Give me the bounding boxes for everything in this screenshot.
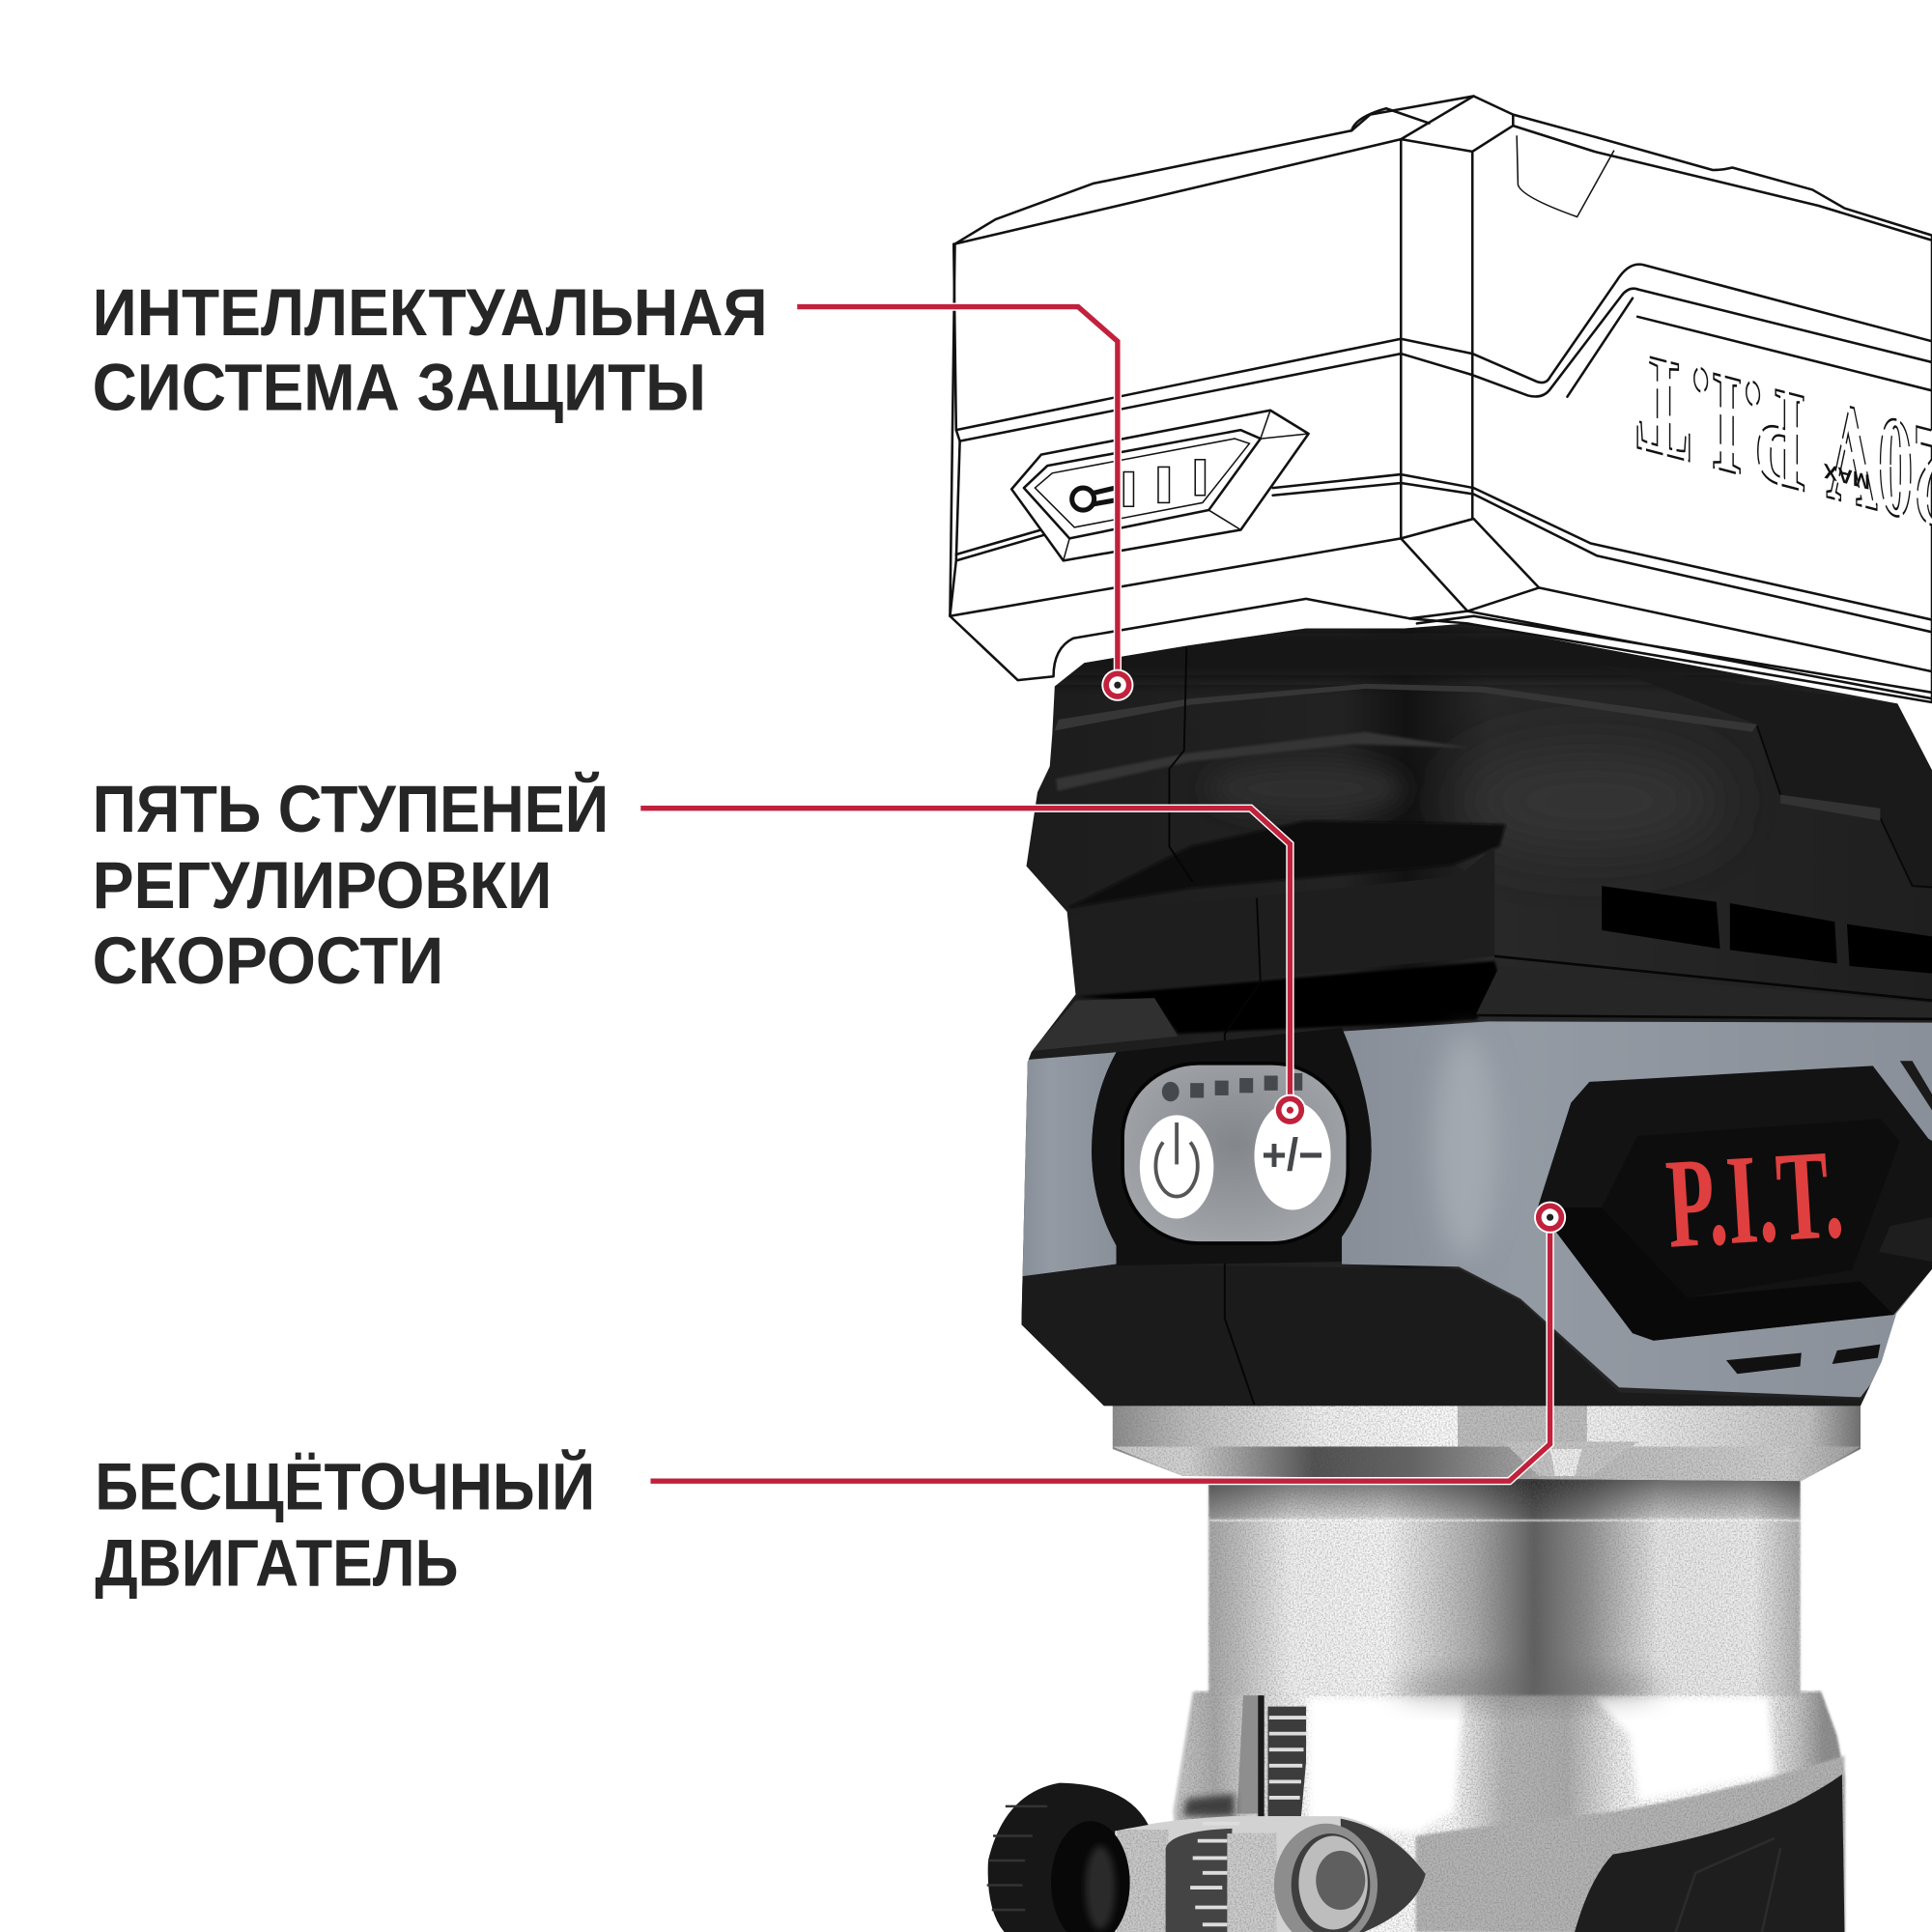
callout: intelligent protection — [93, 276, 1133, 701]
grey band left — [1021, 1052, 1117, 1276]
heading: РЕГУЛИРОВКИ — [93, 849, 552, 923]
shelf front face — [1072, 846, 1494, 994]
black lower base — [1021, 1264, 1861, 1406]
second light band — [1056, 732, 1471, 791]
lower right panel — [1476, 970, 1500, 1014]
heading: ДВИГАТЕЛЬ — [95, 1527, 458, 1601]
battery lettering: P.I.T — [1636, 322, 1805, 524]
power button — [1140, 1115, 1213, 1218]
callout: five speed steps — [93, 771, 1306, 1126]
heading — [93, 771, 609, 998]
battery body — [950, 96, 1932, 702]
shaded lower collar — [1416, 1756, 1844, 1932]
aluminum flange — [1113, 1400, 1861, 1481]
aluminum lower body — [1171, 1690, 1848, 1932]
heading — [93, 276, 768, 425]
left lit corner — [1032, 998, 1178, 1051]
seam line — [1169, 647, 1261, 1052]
logo text: P.I.T. — [1662, 1122, 1847, 1275]
silver bracket — [1117, 1816, 1426, 1932]
gear teeth — [1166, 1829, 1233, 1932]
clamp with dial — [987, 1783, 1426, 1932]
heading: СКОРОСТИ — [93, 924, 443, 998]
heading — [95, 1448, 595, 1601]
round boss — [1341, 1819, 1426, 1932]
speed button — [1254, 1101, 1331, 1210]
aluminum cylinder — [1208, 1479, 1801, 1705]
MAX mark: MAX — [1823, 459, 1870, 495]
heading: БЕСЩЁТОЧНЫЙ — [95, 1448, 595, 1523]
speed indicator LEDs — [1162, 1073, 1302, 1101]
callout: brushless motor — [95, 1202, 1566, 1601]
control surround — [1092, 1028, 1372, 1265]
dark handle grip — [1575, 1775, 1844, 1932]
leader line — [640, 809, 1306, 1126]
line-art battery — [950, 96, 1932, 702]
product: router tool — [950, 96, 1932, 1932]
upper light band — [1055, 684, 1757, 732]
speed button: +/− — [1262, 1130, 1323, 1181]
battery charge indicator — [1011, 411, 1309, 560]
under-shelf shadow — [1076, 961, 1499, 1034]
heading: СИСТЕМА ЗАЩИТЫ — [93, 352, 706, 425]
housing lit areas — [1464, 753, 1704, 849]
leader line — [650, 1202, 1566, 1481]
vents — [1602, 886, 1720, 949]
heading: ИНТЕЛЛЕКТУАЛЬНАЯ — [93, 276, 768, 350]
control panel — [1122, 1064, 1348, 1243]
black motor housing — [1010, 616, 1932, 1417]
heading: ПЯТЬ СТУПЕНЕЙ — [93, 771, 609, 846]
right facet — [1650, 684, 1932, 794]
shelf shadow — [1067, 820, 1506, 908]
black dial — [988, 1783, 1149, 1932]
grey band right — [1342, 1021, 1932, 1397]
battery lettering — [1636, 322, 1932, 561]
logo badge — [1538, 1061, 1932, 1374]
depth adjustment rack — [1182, 1695, 1306, 1819]
leader line — [797, 307, 1133, 701]
white highlight windows — [1309, 1698, 1463, 1833]
